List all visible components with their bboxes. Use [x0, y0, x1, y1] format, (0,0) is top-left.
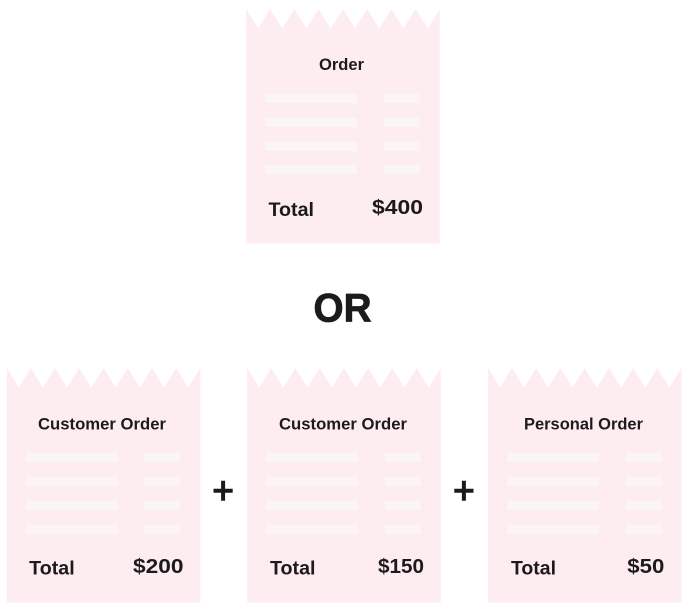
amount: $200: $200	[133, 556, 184, 578]
heading: OR: OR	[314, 286, 372, 330]
label: total: Total	[268, 200, 314, 221]
heading: personal order: Personal Order	[524, 415, 644, 433]
receipt: order	[246, 9, 440, 244]
amount: $50: $50	[627, 556, 664, 578]
label: total: Total	[29, 558, 75, 580]
heading: order: Order	[319, 56, 365, 74]
heading: customer order: Customer Order	[38, 415, 167, 433]
heading: customer order: Customer Order	[279, 415, 408, 433]
amount: $400: $400	[372, 197, 423, 219]
receipt: customer order 150	[247, 368, 441, 603]
amount: $150: $150	[378, 556, 424, 578]
receipt: personal order	[488, 368, 682, 603]
label: total: Total	[511, 558, 556, 580]
icon: plus	[454, 481, 474, 501]
receipt: customer order 200	[7, 368, 200, 603]
label: total: Total	[270, 558, 316, 580]
icon: plus	[214, 481, 233, 501]
